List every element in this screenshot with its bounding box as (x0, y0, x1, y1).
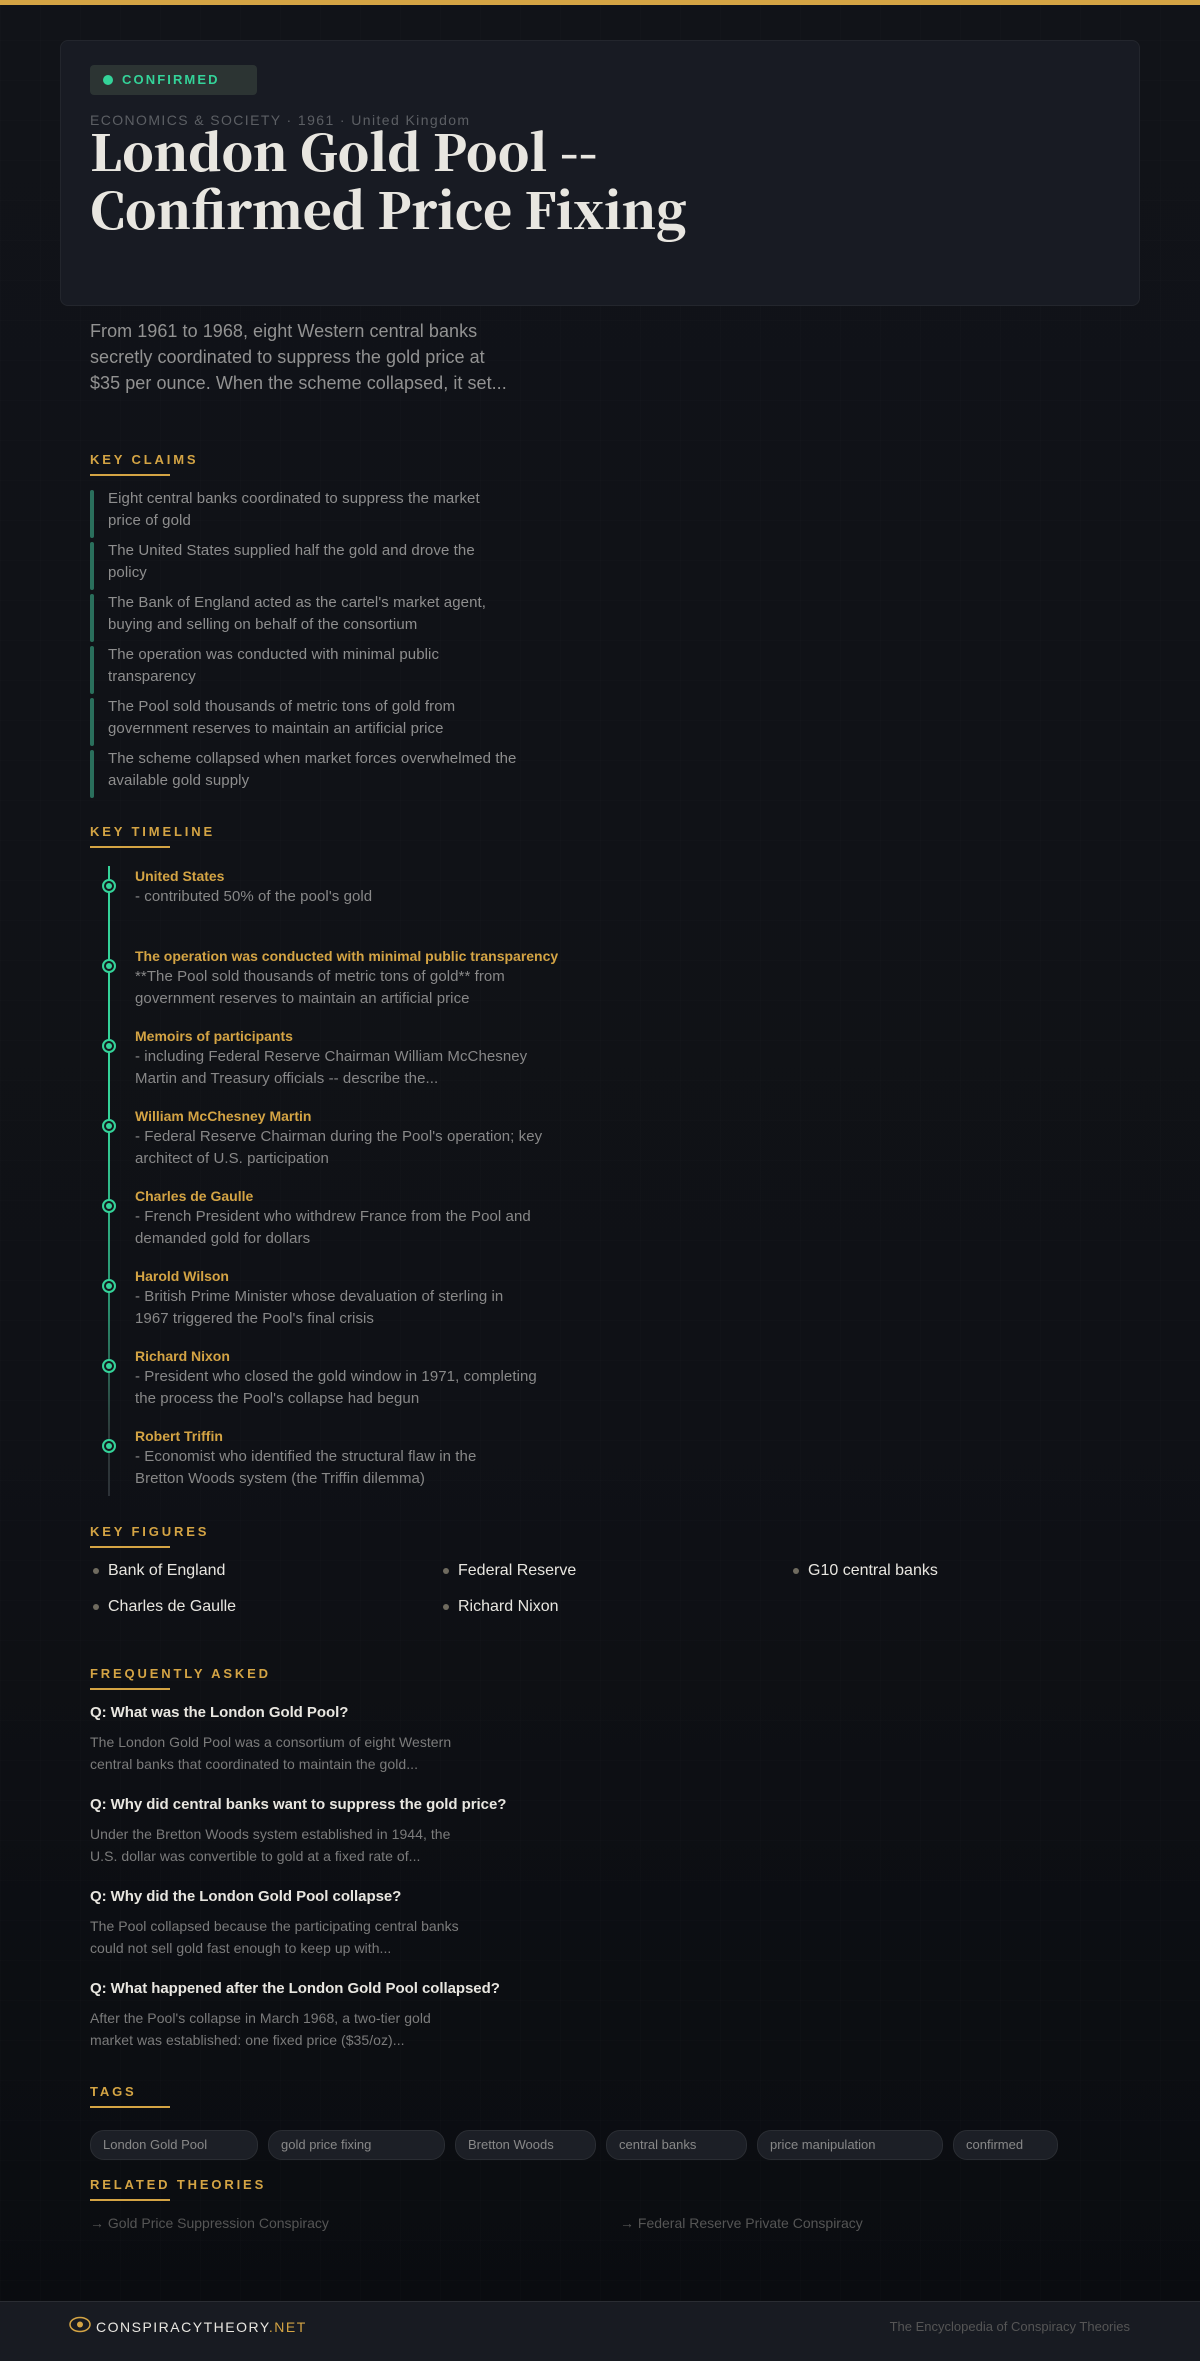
intro text: From 1961 to 1968, eight Western central banks (90, 321, 477, 341)
heading: key claims: KEY CLAIMS (90, 452, 198, 467)
event: Robert Triffin: Robert Triffin (135, 1428, 223, 1444)
FAQ 3: Q: Why did the London Gold Pool collapse? (90, 1888, 401, 1905)
FAQ 1: The London Gold Pool was a consortium of eight Western (90, 1734, 451, 1750)
event: memoirs: - including Federal Reserve Chairman William McChesney (135, 1048, 527, 1065)
claim 5 (90, 698, 455, 746)
badge label: CONFIRMED (122, 72, 220, 87)
figure: Charles de Gaulle: Charles de Gaulle (108, 1598, 236, 1615)
heading: key timeline: KEY TIMELINE (90, 824, 215, 839)
FAQ 4: After the Pool's collapse in March 1968, a two-tier gold (90, 2010, 431, 2026)
tag: London Gold Pool: London Gold Pool (103, 2137, 207, 2152)
event: Robert Triffin: Bretton Woods system (the Triffin dilemma) (135, 1470, 425, 1487)
event: Robert Triffin: - Economist who identified the structural flaw in the (135, 1448, 476, 1465)
node 4 (102, 1119, 116, 1133)
claim 6: The scheme collapsed when market forces overwhelmed the (108, 750, 516, 767)
event: Harold Wilson: Harold Wilson (135, 1268, 229, 1284)
panel: key figures (93, 1562, 938, 1615)
event: Charles de Gaulle: demanded gold for dollars (135, 1230, 310, 1247)
title: London Gold Pool -- (90, 115, 598, 186)
FAQ 4: market was established: one fixed price ($35/oz)... (90, 2032, 405, 2048)
related link 1: → Gold Price Suppression Conspiracy (90, 2215, 329, 2231)
tag: gold price fixing: gold price fixing (281, 2137, 371, 2152)
FAQ 2: Under the Bretton Woods system established in 1944, the (90, 1826, 450, 1842)
claim 3: buying and selling on behalf of the consortium (108, 616, 417, 633)
event: minimal transparency: government reserves to maintain an artificial price (135, 990, 470, 1007)
footer tagline: The Encyclopedia of Conspiracy Theories (890, 2319, 1130, 2334)
event: United States (135, 868, 372, 905)
FAQ 1: Q: What was the London Gold Pool? (90, 1704, 348, 1721)
heading: related theories: RELATED THEORIES (90, 2177, 266, 2192)
panel: key claims list (90, 490, 516, 798)
event: minimal transparency (135, 948, 558, 1007)
claim 3 (90, 594, 486, 642)
node 5 (102, 1199, 116, 1213)
node 1 (102, 879, 116, 893)
event: Richard Nixon (135, 1348, 537, 1407)
event: Richard Nixon: - President who closed the gold window in 1971, completing (135, 1368, 537, 1385)
event: memoirs: Martin and Treasury officials -- describe the... (135, 1070, 438, 1087)
logo wordmark: CONSPIRACYTHEORY.NET (96, 2319, 307, 2335)
FAQ 2: U.S. dollar was convertible to gold at a fixed rate of... (90, 1848, 420, 1864)
claim 2 (90, 542, 475, 590)
category meta line: ECONOMICS & SOCIETY · 1961 · United Kingdom (90, 112, 470, 128)
figure: Federal Reserve: Federal Reserve (458, 1562, 576, 1579)
FAQ 1 (90, 1704, 451, 1772)
icon: eye logo (69, 2316, 91, 2332)
title: Confirmed Price Fixing (90, 173, 687, 244)
FAQ 1: central banks that coordinated to maintain the gold... (90, 1756, 418, 1772)
event: William McChesney Martin: - Federal Reserve Chairman during the Pool's operation; key (135, 1128, 542, 1145)
tag: confirmed: confirmed (966, 2137, 1023, 2152)
claim 4 (90, 646, 439, 694)
figure: Richard Nixon: Richard Nixon (458, 1598, 558, 1615)
panel: hero header (60, 40, 1140, 306)
intro text (90, 321, 507, 393)
tag: central banks: central banks (619, 2137, 696, 2152)
intro text: $35 per ounce. When the scheme collapsed, it set... (90, 373, 507, 393)
claim 1 (90, 490, 480, 538)
tag: Bretton Woods (455, 2130, 596, 2160)
FAQ 3: The Pool collapsed because the participating central banks (90, 1918, 459, 1934)
event: Robert Triffin (135, 1428, 476, 1487)
footer (0, 2301, 1200, 2361)
FAQ 4: Q: What happened after the London Gold Pool collapsed? (90, 1980, 500, 1997)
claim 2: policy (108, 564, 147, 581)
tag: price manipulation: price manipulation (770, 2137, 876, 2152)
FAQ 3 (90, 1888, 459, 1956)
event: William McChesney Martin (135, 1108, 542, 1167)
node 3 (102, 1039, 116, 1053)
node 2 (102, 959, 116, 973)
event: Harold Wilson: 1967 triggered the Pool's final crisis (135, 1310, 374, 1327)
node 6 (102, 1279, 116, 1293)
tag: Bretton Woods: Bretton Woods (468, 2137, 554, 2152)
FAQ 2 (90, 1796, 506, 1864)
event: memoirs (135, 1028, 527, 1087)
event: Richard Nixon: Richard Nixon (135, 1348, 230, 1364)
figure: G10 central banks: G10 central banks (808, 1562, 938, 1579)
related link 2: → Federal Reserve Private Conspiracy (620, 2215, 863, 2231)
event: minimal transparency: The operation was conducted with minimal public transparency (135, 948, 558, 964)
tag: price manipulation (757, 2130, 943, 2160)
title (90, 115, 687, 244)
claim 5: The Pool sold thousands of metric tons of gold from (108, 698, 455, 715)
tag: central banks (606, 2130, 747, 2160)
tag: gold price fixing (268, 2130, 445, 2160)
FAQ 2: Q: Why did central banks want to suppress the gold price? (90, 1796, 506, 1813)
event: Harold Wilson: - British Prime Minister whose devaluation of sterling in (135, 1288, 503, 1305)
timeline line (108, 866, 110, 1496)
claim 5: government reserves to maintain an artificial price (108, 720, 444, 737)
status badge: confirmed (90, 65, 257, 95)
event: Richard Nixon: the process the Pool's collapse had begun (135, 1390, 419, 1407)
node 8 (102, 1439, 116, 1453)
event: William McChesney Martin: architect of U.S. participation (135, 1150, 329, 1167)
panel: timeline (102, 866, 558, 1496)
FAQ 4 (90, 1980, 500, 2048)
event: William McChesney Martin: William McChesney Martin (135, 1108, 311, 1124)
icon: status dot (103, 75, 113, 85)
heading: frequently asked: FREQUENTLY ASKED (90, 1666, 271, 1681)
node 7 (102, 1359, 116, 1373)
claim 1: Eight central banks coordinated to suppress the market (108, 490, 480, 507)
tag: London Gold Pool (90, 2130, 258, 2160)
claim 4: The operation was conducted with minimal public (108, 646, 439, 663)
event: Charles de Gaulle: - French President who withdrew France from the Pool and (135, 1208, 531, 1225)
figure: Bank of England: Bank of England (108, 1562, 225, 1579)
claim 1: price of gold (108, 512, 191, 529)
claim 6 (90, 750, 516, 798)
event: United States: - contributed 50% of the pool's gold (135, 888, 372, 905)
event: United States: United States (135, 868, 224, 884)
claim 3: The Bank of England acted as the cartel's market agent, (108, 594, 486, 611)
FAQ 3: could not sell gold fast enough to keep up with... (90, 1940, 391, 1956)
intro text: secretly coordinated to suppress the gold price at (90, 347, 485, 367)
claim 6: available gold supply (108, 772, 249, 789)
event: Charles de Gaulle (135, 1188, 531, 1247)
heading: key figures: KEY FIGURES (90, 1524, 209, 1539)
heading: tags: TAGS (90, 2084, 137, 2099)
tag: confirmed (953, 2130, 1058, 2160)
claim 2: The United States supplied half the gold and drove the (108, 542, 475, 559)
event: Charles de Gaulle: Charles de Gaulle (135, 1188, 253, 1204)
event: Harold Wilson (135, 1268, 503, 1327)
top accent bar (0, 0, 1200, 5)
event: memoirs: Memoirs of participants (135, 1028, 293, 1044)
claim 4: transparency (108, 668, 196, 685)
event: minimal transparency: **The Pool sold thousands of metric tons of gold** from (135, 968, 505, 985)
